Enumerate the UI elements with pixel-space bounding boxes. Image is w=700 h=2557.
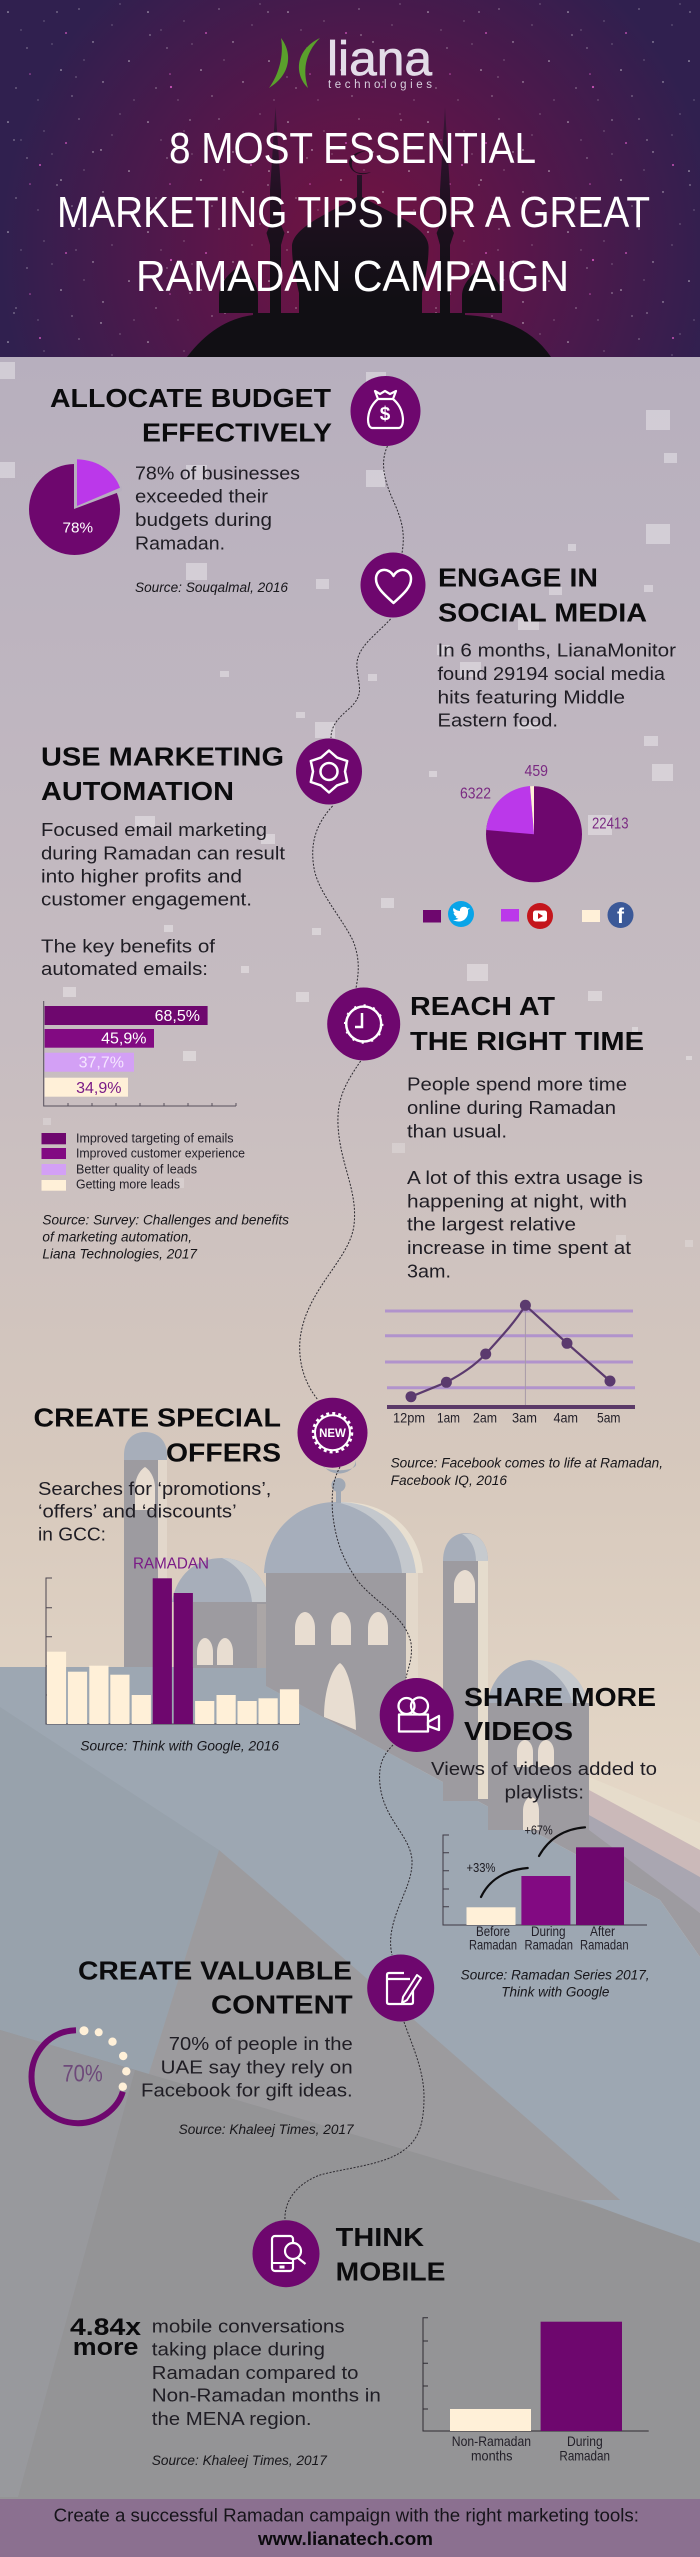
heading: ALLOCATE BUDGET: [50, 383, 331, 413]
source: [461, 1967, 650, 1999]
body text: [431, 1758, 657, 1802]
footer band: [0, 2499, 700, 2557]
mosque silhouette: [187, 107, 551, 357]
bar chart: playlist views: Ramadan: [580, 1937, 629, 1953]
background: faint lower squares: [43, 1118, 693, 1247]
line chart: time online: 2am: [473, 1410, 497, 1426]
tip 5: special offers: [34, 1398, 368, 1754]
heading: [78, 1955, 353, 2019]
logo: liana: [327, 33, 432, 86]
body text: in GCC:: [38, 1524, 106, 1545]
footer band: Create a successful Ramadan campaign with the right marketing tools:: [54, 2506, 639, 2526]
body text: ‘offers’ and ‘discounts’: [38, 1500, 237, 1521]
heading: SHARE MORE: [464, 1682, 656, 1712]
body text: customer engagement.: [41, 889, 252, 910]
icon: heart: [360, 552, 426, 618]
icon: video camera: [380, 1678, 454, 1752]
source: Source: Khaleej Times, 2017: [152, 2453, 327, 2468]
tip 4: reach at the right time: [327, 988, 663, 1488]
source: Source: Souqalmal, 2016: [135, 580, 288, 595]
body text: [152, 2315, 381, 2429]
central dome: [264, 1460, 423, 1768]
body text: Views of videos added to: [431, 1758, 657, 1779]
bar chart: playlist views: +33%: [466, 1861, 496, 1875]
source: Source: Khaleej Times, 2017: [179, 2122, 354, 2137]
heading: MOBILE: [336, 2257, 446, 2287]
tip 8: think mobile: [70, 2220, 649, 2468]
body text: 70% of people in the: [169, 2033, 353, 2054]
pie chart: social media hits: 6322: [460, 785, 491, 802]
body text: [38, 1478, 271, 1545]
bar chart: mobile conversations: Non-Ramadan: [452, 2433, 531, 2449]
progress ring: 70%: 70%: [62, 2061, 103, 2088]
body text: Focused email marketing: [41, 819, 267, 840]
body text: [41, 819, 285, 979]
source: [42, 1212, 289, 1262]
bar chart: mobile conversations: During: [567, 2433, 603, 2449]
body text: the largest relative: [407, 1214, 576, 1235]
icon: gear: [296, 738, 362, 804]
body text: during Ramadan can result: [41, 842, 285, 863]
body text: exceeded their: [135, 486, 268, 507]
body text: mobile conversations: [152, 2315, 345, 2336]
heading: REACH AT: [410, 991, 555, 1021]
bar chart: playlist views: Ramadan: [469, 1937, 517, 1953]
logo: technologies: [328, 79, 432, 91]
icon: phone and magnifier: [252, 2220, 320, 2287]
line chart: time online: [385, 1300, 635, 1426]
heading: AUTOMATION: [41, 776, 234, 806]
heading: [41, 742, 284, 806]
bar chart: email benefits: [44, 1001, 236, 1106]
tip 7: valuable content: [32, 1954, 434, 2137]
body text: [135, 462, 300, 553]
icon: youtube: [527, 903, 553, 929]
body text: the MENA region.: [152, 2408, 312, 2429]
body text: 78% of businesses: [135, 462, 300, 483]
bar chart: email benefits: 45,9%: [101, 1030, 146, 1048]
icon: twitter: [448, 901, 474, 927]
body text: Ramadan compared to: [152, 2362, 358, 2383]
small left dome: [172, 1558, 270, 1668]
body text: The key benefits of: [41, 935, 216, 956]
logo: [269, 33, 432, 91]
left minaret: [124, 1432, 167, 1667]
body text: budgets during: [135, 509, 272, 530]
pie chart: social media hits: 459: [524, 763, 548, 780]
body text: A lot of this extra usage is: [407, 1167, 643, 1188]
ground bands: [589, 1777, 700, 1850]
bar chart: email benefits: 34,9%: [76, 1080, 122, 1097]
icon: new badge: [298, 1398, 368, 1468]
bar chart: mobile conversations: months: [471, 2448, 512, 2464]
icon: notepad and pen: [367, 1954, 434, 2022]
line chart: time online: 3am: [512, 1410, 537, 1426]
heading: [50, 383, 332, 448]
heading: ENGAGE IN: [438, 563, 598, 593]
bar chart: email benefits: 68,5%: [155, 1008, 200, 1025]
legend: email benefits: [42, 1131, 245, 1191]
body text: [407, 1074, 643, 1281]
bar chart: mobile conversations: Ramadan: [559, 2448, 610, 2464]
legend: email benefits: Better quality of leads: [76, 1161, 197, 1176]
heading: [410, 991, 644, 1056]
header panel: [0, 0, 700, 357]
icon: money bag: [350, 376, 420, 446]
source: Facebook IQ, 2016: [391, 1473, 507, 1488]
bar chart: playlist views: After: [590, 1923, 615, 1939]
bar chart: searches: [46, 1555, 300, 1724]
bar chart: mobile conversations: [423, 2318, 649, 2464]
source: [391, 1456, 663, 1488]
body text: increase in time spent at: [407, 1237, 631, 1258]
callout: 4.84x more: 4.84x: [70, 2314, 142, 2341]
bar chart: playlist views: Before: [476, 1923, 510, 1939]
crescent: [349, 151, 371, 174]
body text: Searches for ‘promotions’,: [38, 1478, 271, 1499]
heading: CREATE VALUABLE: [78, 1955, 352, 1985]
body text: In 6 months, LianaMonitor: [438, 640, 676, 661]
tip 1: allocate budget: [29, 376, 420, 595]
background: mosque and landscape: [0, 1432, 700, 2557]
heading: [336, 2222, 446, 2287]
body text: Non-Ramadan months in: [152, 2385, 381, 2406]
source: of marketing automation,: [42, 1230, 192, 1245]
heading: USE MARKETING: [41, 742, 284, 772]
line chart: time online: 5am: [597, 1410, 620, 1426]
dotted path connecting the tips: [285, 446, 424, 2220]
heading: [34, 1403, 281, 1468]
pie chart: social media hits: 22413: [592, 815, 629, 832]
icon: facebook: [608, 902, 634, 928]
pie chart: social media hits: [460, 763, 629, 882]
callout: 4.84x more: more: [73, 2334, 138, 2361]
body text: playlists:: [504, 1781, 584, 1802]
body text: 3am.: [407, 1260, 451, 1281]
title: 8 MOST ESSENTIAL: [169, 124, 536, 173]
footer band: www.lianatech.com: [257, 2529, 433, 2549]
body text: hits featuring Middle: [438, 686, 625, 707]
line chart: time online: 4am: [554, 1410, 578, 1426]
bar chart: playlist views: [443, 1823, 647, 1953]
source: Liana Technologies, 2017: [42, 1247, 197, 1262]
body text: People spend more time: [407, 1074, 627, 1095]
icon: new badge: NEW: [319, 1428, 346, 1440]
bar chart: email benefits: 37,7%: [79, 1055, 124, 1072]
bar chart: playlist views: During: [531, 1923, 566, 1939]
legend: email benefits: Improved customer experience: [76, 1145, 245, 1160]
line chart: time online: 1am: [437, 1410, 460, 1426]
bar chart: playlist views: +67%: [524, 1823, 553, 1837]
legend: social networks: [423, 901, 634, 929]
source: Source: Facebook comes to life at Ramadan,: [391, 1456, 663, 1471]
progress ring: 70%: [32, 2026, 130, 2123]
heading: VIDEOS: [464, 1716, 573, 1746]
line chart: time online: 12pm: [393, 1410, 425, 1426]
body text: automated emails:: [41, 958, 208, 979]
body text: Ramadan.: [135, 532, 225, 553]
tip 6: share more videos: [380, 1678, 657, 1999]
body text: taking place during: [152, 2339, 325, 2360]
heading: [464, 1682, 656, 1746]
body text: Eastern food.: [438, 710, 558, 731]
title: RAMADAN CAMPAIGN: [136, 252, 569, 301]
callout: 4.84x more: [70, 2314, 142, 2361]
grey hill behind the mosque: [266, 1600, 700, 1957]
blue-grey ground: [0, 1667, 700, 2557]
source: Source: Survey: Challenges and benefits: [42, 1212, 289, 1227]
pie chart: 78%: [29, 459, 122, 555]
body text: [141, 2033, 353, 2101]
bar chart: searches: RAMADAN: [133, 1555, 209, 1572]
body text: online during Ramadan: [407, 1097, 616, 1118]
body text: UAE say they rely on: [161, 2056, 353, 2077]
body text: happening at night, with: [407, 1190, 627, 1211]
tip 3: marketing automation: [41, 738, 362, 1262]
body text: [438, 640, 676, 731]
heading: THE RIGHT TIME: [410, 1026, 644, 1056]
bar chart: playlist views: Ramadan: [524, 1937, 573, 1953]
heading: OFFERS: [166, 1438, 281, 1468]
heading: SOCIAL MEDIA: [438, 598, 647, 628]
icon: clock: [327, 988, 400, 1060]
right small dome: [488, 1660, 589, 1830]
body text: found 29194 social media: [438, 663, 666, 684]
source: Source: Think with Google, 2016: [80, 1739, 279, 1754]
tip 2: social media: [360, 552, 676, 929]
body text: than usual.: [407, 1120, 507, 1141]
legend: email benefits: Getting more leads: [76, 1176, 180, 1191]
heading: EFFECTIVELY: [142, 418, 332, 448]
legend: email benefits: Improved targeting of emails: [76, 1131, 234, 1146]
body text: Facebook for gift ideas.: [141, 2080, 353, 2101]
background: floating squares: [0, 362, 692, 1061]
right minaret: [443, 1533, 488, 1801]
heading: CREATE SPECIAL: [34, 1403, 281, 1433]
icon: money bag: $: [380, 404, 391, 425]
body text: into higher profits and: [41, 865, 242, 886]
heading: CONTENT: [211, 1989, 353, 2019]
title: [57, 124, 650, 301]
source: Source: Ramadan Series 2017,: [461, 1967, 650, 1982]
heading: [438, 563, 647, 628]
pie chart: 78%: 78%: [62, 520, 93, 537]
icon: facebook: f: [617, 905, 625, 928]
heading: THINK: [336, 2222, 424, 2252]
source: Think with Google: [501, 1984, 609, 1999]
